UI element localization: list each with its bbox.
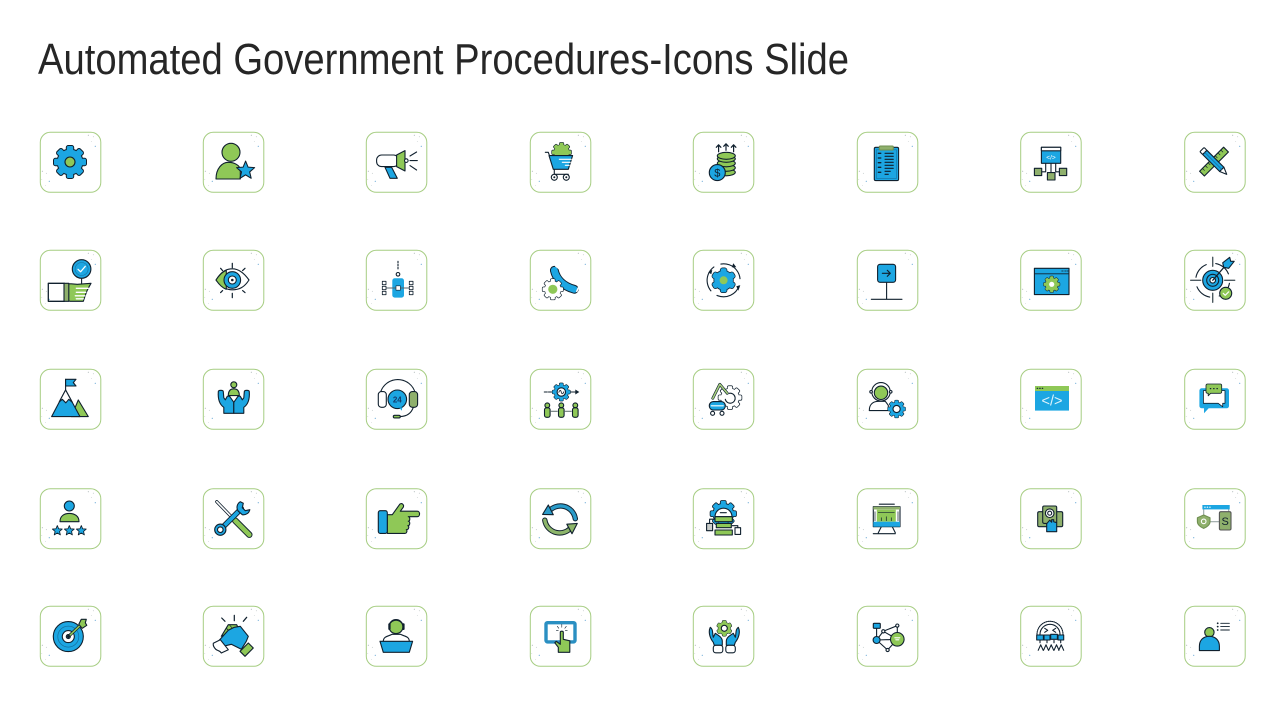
icon: hands holding person — [218, 382, 249, 413]
icon: handshake — [213, 615, 253, 656]
icon: refresh cycle — [543, 505, 577, 534]
icon tile: pencil and ruler — [1185, 132, 1245, 192]
icon: pointing hand — [378, 504, 420, 533]
icon tile: gear — [40, 132, 101, 192]
icon tile: touch screen — [530, 606, 591, 666]
icon: pencil and ruler — [1200, 147, 1229, 176]
icon tile: browser with gear — [1021, 250, 1081, 310]
icon tile: support agent at laptop — [366, 606, 427, 666]
icon tile: person with three stars — [40, 489, 101, 549]
icon: gear — [54, 146, 86, 178]
icon tile: clipboard — [857, 132, 918, 192]
icon tile: handshake — [203, 606, 264, 666]
icon tile: sign post — [857, 250, 918, 310]
icon: shopping cart — [545, 143, 573, 180]
icon tile: wrench and screwdriver — [203, 489, 264, 549]
icon: network nodes — [873, 623, 904, 652]
title: Automated Government Procedures-Icons Slide — [38, 35, 849, 84]
icon: code window network: </> — [1046, 154, 1056, 161]
icon: target with check — [1191, 257, 1235, 302]
icon tile: person with star — [203, 132, 264, 192]
icon: gear with cycle arrows — [702, 259, 745, 301]
icon tile: headset agent with gear — [857, 369, 918, 429]
icon tile: conference audience — [1021, 606, 1081, 666]
icon tile: megaphone — [366, 132, 427, 192]
icon tile: coins with arrows — [693, 132, 754, 192]
icon: hands with gear — [709, 621, 739, 653]
icon tile: phone with gear — [530, 250, 591, 310]
icon tile: person with list — [1185, 606, 1245, 666]
icon: server with gear — [707, 501, 741, 535]
icon: support agent at laptop — [380, 620, 413, 652]
icon tile: refresh cycle — [530, 489, 591, 549]
icon: hand holding check sign — [48, 260, 91, 301]
icon: 24 hour headset: 24 — [393, 395, 402, 404]
icon tile: eye — [203, 250, 264, 310]
icon: headset agent with gear — [869, 383, 905, 418]
icon: mountain flag — [52, 379, 88, 417]
icon: wrench and screwdriver — [215, 502, 250, 535]
icon tile: target with check — [1185, 250, 1245, 310]
icon tile: network nodes — [857, 606, 918, 666]
icon: person with star — [216, 143, 255, 179]
icon: monitor dashboard — [873, 504, 900, 534]
icon: coins with arrows: $ — [714, 168, 720, 180]
icon: clipboard — [874, 146, 899, 181]
icon tile: server with gear — [693, 489, 754, 549]
icon tile: hand holding check sign — [40, 250, 101, 310]
icon tile: gear with cycle arrows — [693, 250, 754, 310]
icon tile: connected device — [366, 250, 427, 310]
icon tile: 24 hour headset — [366, 369, 427, 429]
icon: chat bubbles — [1199, 384, 1229, 413]
icon: touch screen — [546, 623, 575, 652]
icon: code window: </> — [1042, 393, 1063, 410]
icon tile: touch tablets — [1021, 489, 1081, 549]
icon tile: monitor dashboard — [857, 489, 918, 549]
icon: conference audience — [1037, 621, 1064, 650]
icon tile: mountain flag — [40, 369, 101, 429]
icon: megaphone — [377, 151, 417, 178]
icon tile: hands with gear — [693, 606, 754, 666]
icon: connected device — [382, 261, 413, 298]
icon tile: hands holding person — [203, 369, 264, 429]
icon tile: code window network — [1021, 132, 1081, 192]
icon tile: dart target — [40, 606, 101, 666]
icon: touch tablets — [1038, 506, 1063, 532]
icon: phone with gear — [543, 266, 579, 300]
icon: eye — [216, 263, 249, 298]
icon tile: robot arm with gear — [693, 369, 754, 429]
icon: browser, shield and phone: S — [1222, 516, 1229, 528]
icon tile: process gear with people — [530, 369, 591, 429]
icon: person with list — [1199, 622, 1229, 651]
icon tile: pointing hand — [366, 489, 427, 549]
icon tile: shopping cart — [530, 132, 591, 192]
icon tile: browser, shield and phone — [1185, 489, 1245, 549]
icon tile: code window — [1021, 369, 1081, 429]
icon tile: chat bubbles — [1185, 369, 1245, 429]
icon: sign post — [871, 264, 902, 299]
icon: process gear with people — [544, 383, 579, 417]
icon: person with three stars — [52, 501, 86, 535]
icon: robot arm with gear — [709, 384, 742, 415]
icon: dart target — [53, 619, 87, 652]
icon: browser with gear — [1034, 268, 1069, 295]
